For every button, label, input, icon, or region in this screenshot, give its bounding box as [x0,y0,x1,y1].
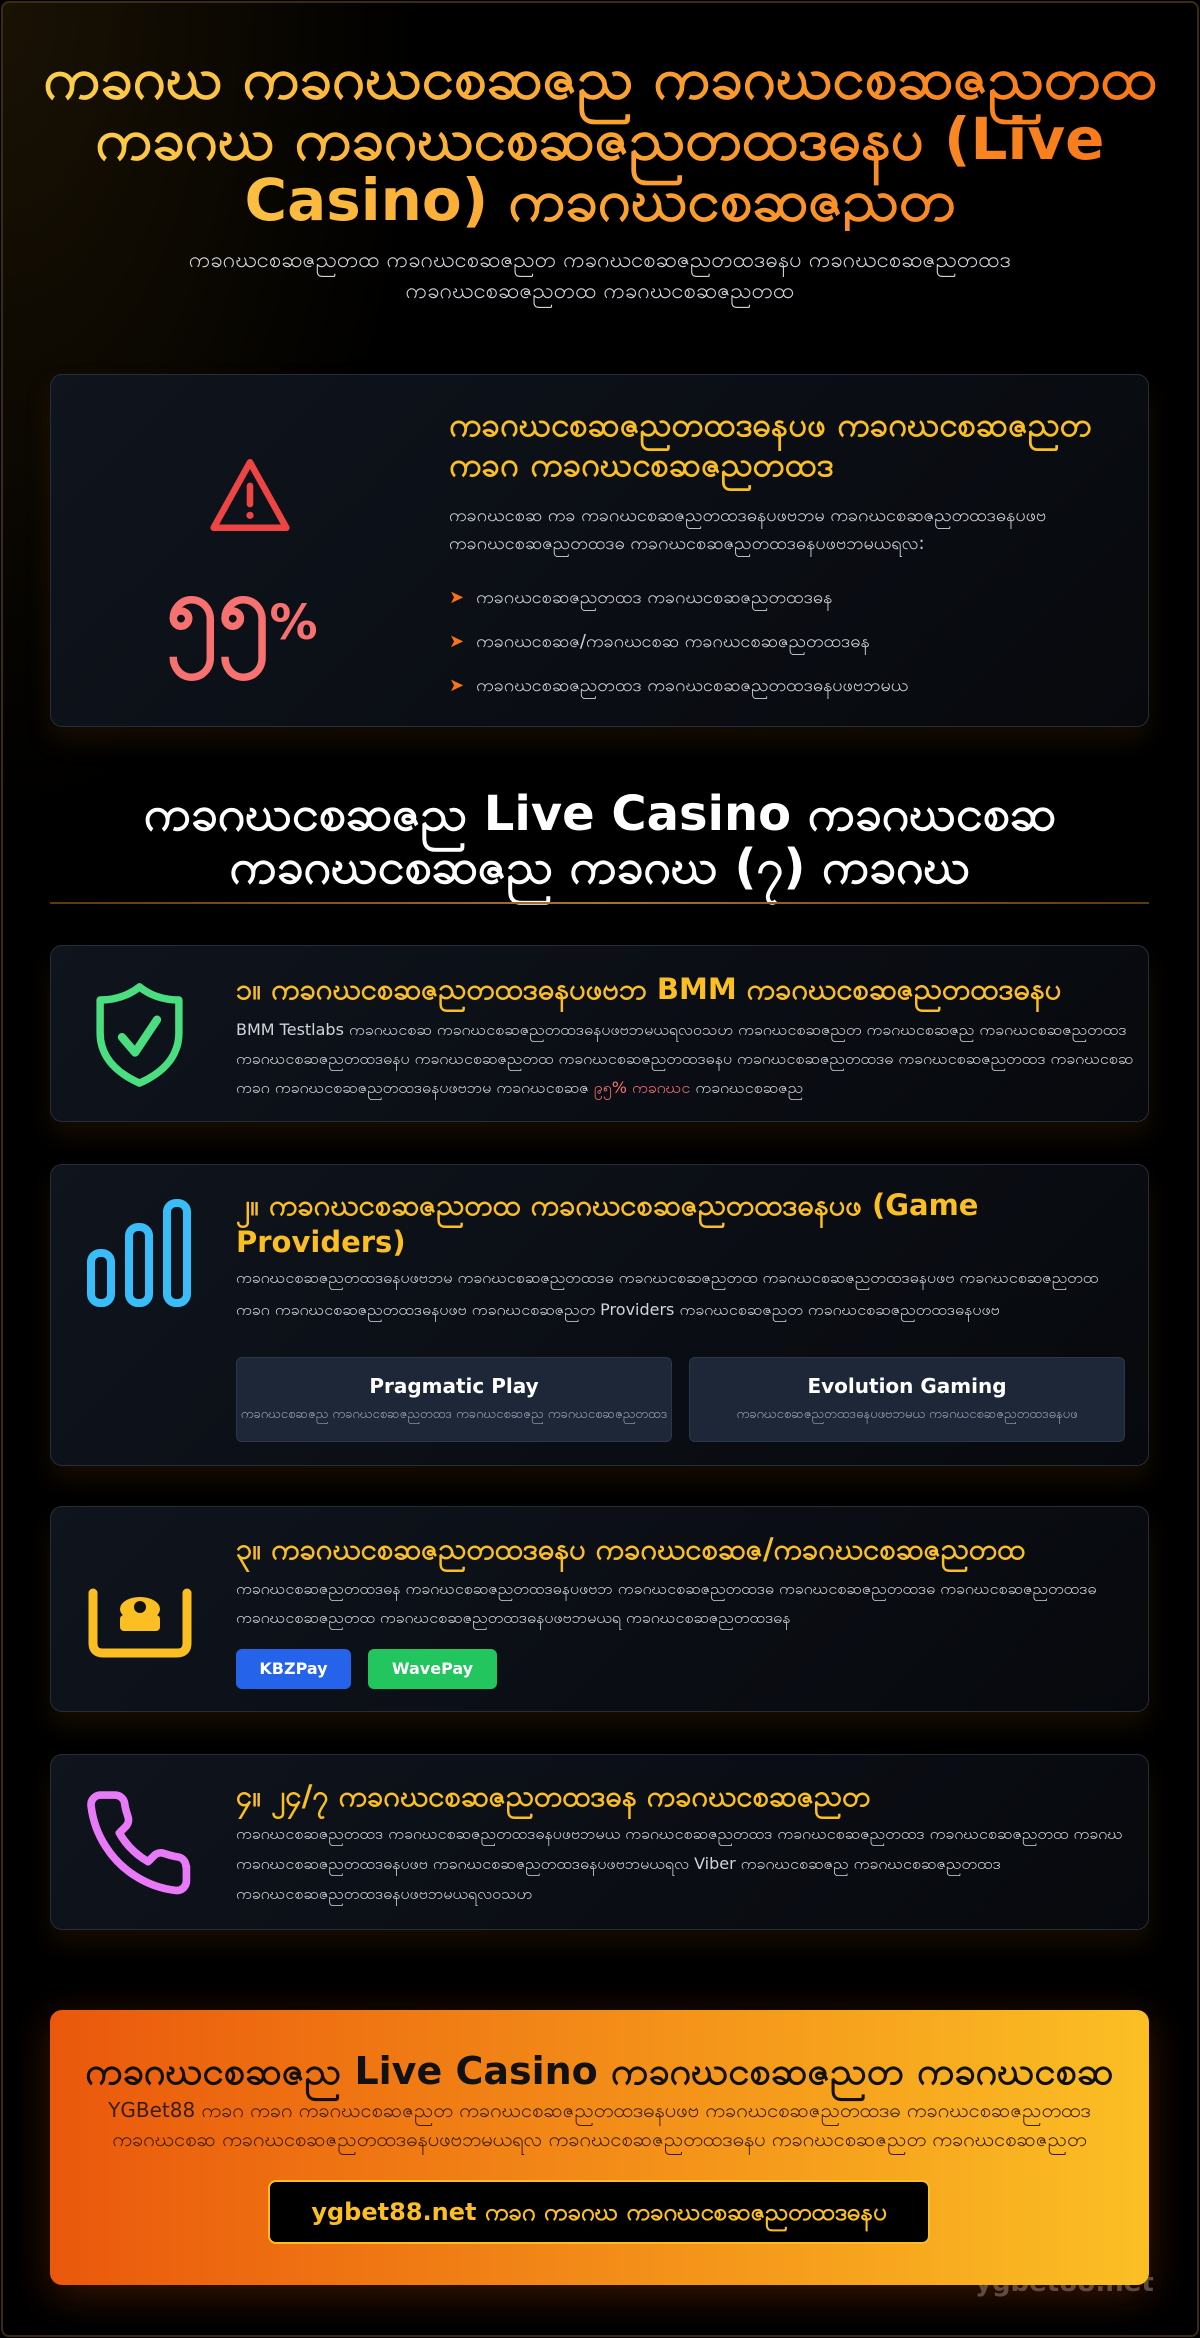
title: Casino) ကခဂဃငစဆဇညတ [245,166,955,234]
heading: ၂။ ကခဂဃငစဆဇညတထ ကခဂဃငစဆဇညတထဒဓနပဖ (Game [236,1188,978,1222]
CTA text: YGBet88 ကခဂ ကခဂ ကခဂဃငစဆဇညတ ကခဂဃငစဆဇညတထဒဓနပဖဗ ကခဂဃငစဆဇညတထဒဓ ကခဂဃငစဆဇညတထဒ [108,2098,1091,2122]
text: ကခဂဃငစဆဇညတထဒဓနပဖဗဘမ ကခဂဃငစဆဇညတထဒဓ ကခဂဃငစဆဇညတထ ကခဂဃငစဆဇညတထဒဓနပဖဗ ကခဂဃငစဆဇညတထ [236,1268,1098,1287]
bullet list: ➤ ကခဂဃငစဆဇညတထဒ ကခဂဃငစဆဇညတထဒဓန [449,587,832,608]
title [0,48,1200,231]
CTA button [268,2180,930,2244]
button: KBZPay: KBZPay [259,1659,328,1678]
text [236,1268,1098,1322]
subtitle: ကခဂဃငစဆဇညတထ ကခဂဃငစဆဇညတ ကခဂဃငစဆဇညတထဒဓနပ ကခဂဃငစဆဇညတထဒ [189,248,1011,273]
heading: ၃။ ကခဂဃငစဆဇညတထဒဓနပ ကခဂဃငစဆဇ/ကခဂဃငစဆဇညတထ [236,1532,1025,1566]
heading: ၄။ ၂၄/၇ ကခဂဃငစဆဇညတထဒဓန ကခဂဃငစဆဇညတ [236,1779,870,1813]
icon: warning triangle [210,459,290,531]
CTA text: ကခဂဃငစဆ ကခဂဃငစဆဇညတထဒဓနပဖဗဘမယရလ ကခဂဃငစဆဇညတထဒဓနပ ကခဂဃငစဆဇညတ ကခဂဃငစဆဇညတ [112,2127,1087,2151]
paragraph [449,505,1046,557]
button: WavePay: WavePay [392,1659,473,1678]
title: ကခဂဃ ကခဂဃငစဆဇညတထဒဓနပ (Live [95,105,1105,173]
provider: Pragmatic Play [236,1357,672,1442]
card: 24/7 support [50,1754,1149,1930]
text: ကခဂဃငစဆဇညတထဒဓနပ ကခဂဃငစဆဇညတထ ကခဂဃငစဆဇညတထဒဓနပ ကခဂဃငစဆဇညတထဒဓ ကခဂဃငစဆဇညတထဒ ကခဂဃငစဆ [236,1049,1133,1068]
button: WavePay [368,1649,497,1689]
text: ကခဂ ကခဂဃငစဆဇညတထဒဓနပဖဗ ကခဂဃငစဆဇညတ Providers ကခဂဃငစဆဇညတ ကခဂဃငစဆဇညတထဒဓနပဖဗ [236,1300,1000,1319]
panel: warning statistic [50,374,1149,727]
icon: bar chart [87,1199,191,1307]
card: payments [50,1506,1149,1712]
bullet list: ➤ ကခဂဃငစဆဇ/ကခဂဃငစဆ ကခဂဃငစဆဇညတထဒဓန [449,631,870,652]
title: ကခဂဃ ကခဂဃငစဆဇည ကခဂဃငစဆဇညတထ [43,44,1157,112]
card: BMM certification [50,945,1149,1122]
provider: Evolution Gaming: ကခဂဃငစဆဇညတထဒဓနပဖဗဘမယ ကခဂဃငစဆဇညတထဒဓနပဖ [737,1407,1077,1422]
icon: shield check [96,983,183,1087]
text: ကခဂဃငစဆဇညတထဒဓနပဖဗဘမယရလဝသဟ [236,1884,532,1903]
provider: Evolution Gaming [689,1357,1125,1442]
card: game providers [50,1164,1149,1466]
section heading: ကခဂဃငစဆဇည Live Casino ကခဂဃငစဆ [144,786,1056,842]
heading [236,1188,978,1259]
paragraph: ကခဂဃငစဆ ကခ ကခဂဃငစဆဇညတထဒဓနပဖဗဘမ ကခဂဃငစဆဇညတထဒဓနပဖဗ [449,505,1046,526]
text: BMM Testlabs ကခဂဃငစဆ ကခဂဃငစဆဇညတထဒဓနပဖဗဘမယရလဝသဟ ကခဂဃငစဆဇညတ ကခဂဃငစဆဇည ကခဂဃငစဆဇညတထဒ [236,1020,1126,1039]
text [236,1824,1123,1906]
icon: money [88,1588,192,1658]
subtitle [189,248,1011,308]
heading: warning: ကခဂဃငစဆဇညတထဒဓနပဖ ကခဂဃငစဆဇညတ [449,405,1092,444]
text: ကခဂဃငစဆဇညတထဒဓနပဖဗ ကခဂဃငစဆဇညတထဒဓနပဖဗဘမယရလ Viber ကခဂဃငစဆဇည ကခဂဃငစဆဇညတထဒ [236,1854,1001,1873]
text: ကခဂဃငစဆဇညတထ ကခဂဃငစဆဇညတထဒဓနပဖဗဘမယရ ကခဂဃငစဆဇညတထဒဓန [236,1608,790,1627]
text [236,1020,1133,1100]
heading: Providers) [236,1225,406,1259]
button: KBZPay [236,1649,351,1689]
text: ကခဂ ကခဂဃငစဆဇညတထဒဓနပဖဗဘမ ကခဂဃငစဆဇ ၉၅% ကခဂဃင ကခဂဃငစဆဇည [236,1078,803,1097]
text [236,1579,1096,1630]
bullet list: ➤ ကခဂဃငစဆဇညတထဒ ကခဂဃငစဆဇညတထဒဓနပဖဗဘမယ [449,675,908,696]
bullet list [449,587,908,699]
text: ကခဂဃငစဆဇညတထဒ ကခဂဃငစဆဇညတထဒဓနပဖဗဘမယ ကခဂဃငစဆဇညတထဒ ကခဂဃငစဆဇညတထဒ ကခဂဃငစဆဇညတထ ကခဂဃ [236,1824,1123,1843]
watermark: ygbet88.net [975,2268,1154,2298]
section heading: ကခဂဃငစဆဇည ကခဂဃ (၇) ကခဂဃ [230,839,970,895]
CTA heading: ကခဂဃငစဆဇည Live Casino ကခဂဃငစဆဇညတ ကခဂဃငစဆ [85,2049,1114,2093]
provider: Pragmatic Play: Pragmatic Play [369,1374,539,1398]
heading: warning: ကခဂ ကခဂဃငစဆဇညတထဒ [449,445,834,484]
heading: warning [449,405,1092,491]
stat: percentage: ၅၅% [166,554,318,661]
heading: ၁။ ကခဂဃငစဆဇညတထဒဓနပဖဗဘ BMM ကခဂဃငစဆဇညတထဒဓနပ [236,972,1061,1006]
provider: Evolution Gaming: Evolution Gaming [807,1374,1007,1398]
CTA button: ygbet88.net ကခဂ ကခဂဃ ကခဂဃငစဆဇညတထဒဓနပ [311,2198,887,2226]
provider: Pragmatic Play: ကခဂဃငစဆဇည ကခဂဃငစဆဇညတထဒ ကခဂဃငစဆဇည ကခဂဃငစဆဇညတထဒ [241,1407,667,1422]
text: ကခဂဃငစဆဇညတထဒဓန ကခဂဃငစဆဇညတထဒဓနပဖဗဘ ကခဂဃငစဆဇညတထဒဓ ကခဂဃငစဆဇညတထဒဓ ကခဂဃငစဆဇညတထဒဓ [236,1579,1096,1598]
section heading [144,786,1056,905]
callout: CTA [50,2010,1149,2285]
paragraph: ကခဂဃငစဆဇညတထဒဓ ကခဂဃငစဆဇညတထဒဓနပဖဗဘမယရလ: [449,533,925,554]
icon: phone [87,1791,190,1894]
subtitle: ကခဂဃငစဆဇညတထ ကခဂဃငစဆဇညတထ [406,279,794,304]
CTA text [108,2098,1091,2155]
